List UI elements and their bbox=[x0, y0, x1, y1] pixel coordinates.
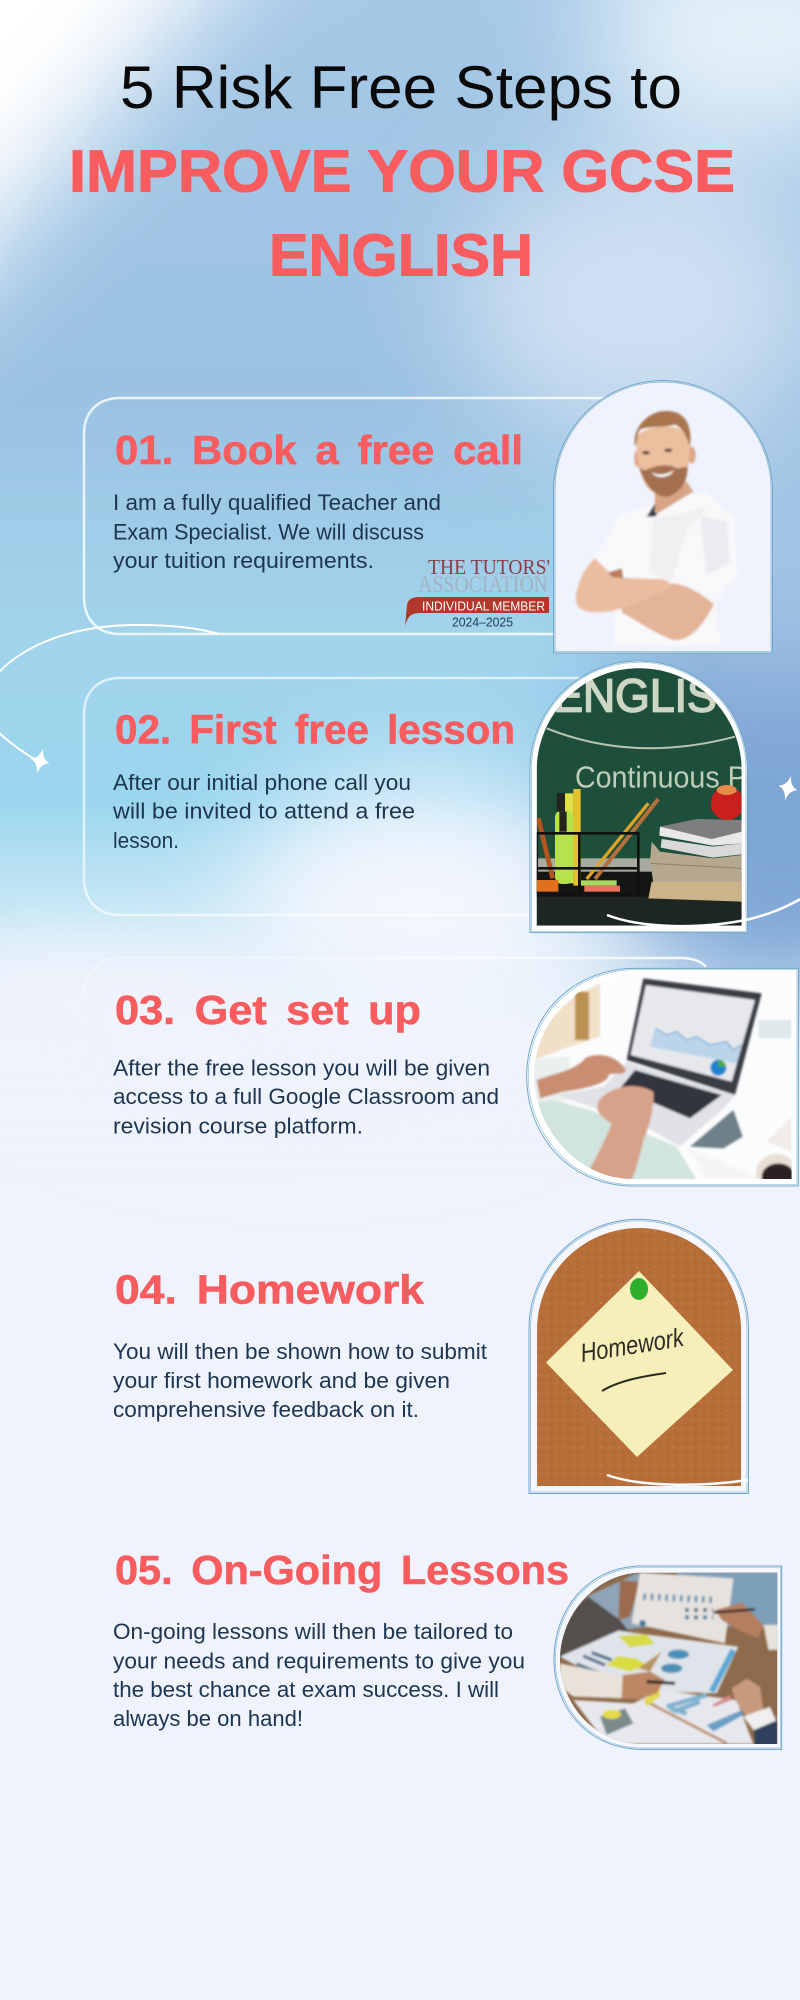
white curve over image bbox=[607, 1475, 748, 1485]
step 5 heading: 05. On-Going Lessons bbox=[115, 1547, 569, 1593]
step 5 text bbox=[113, 1619, 525, 1731]
step 3 text: After the free lesson you will be given bbox=[113, 1056, 490, 1080]
step 1 text: I am a fully qualified Teacher and bbox=[113, 490, 441, 515]
mug and notebook bbox=[767, 1117, 792, 1152]
step 1 text: Exam Specialist. We will discuss bbox=[113, 520, 424, 544]
title: ENGLISH bbox=[269, 222, 533, 288]
step 4 text: comprehensive feedback on it. bbox=[113, 1397, 419, 1422]
image: chalkboard with books, pencils and apple in an arch: Continuous P bbox=[575, 761, 747, 795]
decorative swoosh with star, left bbox=[0, 625, 219, 776]
image: homework sticky note pinned on cork board bbox=[529, 1219, 748, 1494]
logo: The Tutors' Association badge bbox=[405, 555, 550, 630]
step 2 text: will be invited to attend a free bbox=[112, 798, 415, 824]
logo: The Tutors' Association badge: INDIVIDUAL MEMBER bbox=[422, 598, 545, 614]
shirt bbox=[595, 492, 737, 646]
neck bbox=[655, 482, 693, 514]
image: hands typing on a laptop bbox=[527, 968, 798, 1193]
step 3 text: access to a full Google Classroom and bbox=[113, 1084, 499, 1109]
step 1 text: your tuition requirements. bbox=[113, 548, 374, 573]
panel: step 3 card outline bbox=[84, 958, 706, 995]
hair bbox=[635, 411, 691, 447]
image: people reviewing charts on paper bbox=[554, 1566, 782, 1749]
hands bbox=[537, 1055, 626, 1098]
step 2 text: lesson. bbox=[113, 828, 179, 853]
beard bbox=[639, 465, 687, 497]
step 5 text: On-going lessons will then be tailored to bbox=[113, 1619, 513, 1644]
title: 5 Risk Free Steps to bbox=[120, 54, 682, 121]
logo: The Tutors' Association badge: 2024–2025 bbox=[452, 616, 513, 630]
eyes bbox=[642, 451, 650, 454]
image: chalkboard with books, pencils and apple in an arch: ENGLIS bbox=[553, 670, 717, 722]
panel: step 1 card outline bbox=[84, 398, 612, 634]
step 1 heading: 01. Book a free call bbox=[115, 427, 523, 473]
logo: The Tutors' Association badge: THE TUTORS' bbox=[428, 555, 550, 579]
step 2 text bbox=[112, 770, 415, 853]
books bbox=[648, 819, 742, 902]
step 3 text bbox=[113, 1056, 499, 1138]
laptop bbox=[627, 978, 762, 1095]
image: homework sticky note pinned on cork board: Homework bbox=[578, 1322, 687, 1368]
pencil holder bbox=[537, 789, 658, 895]
step 5 text: always be on hand! bbox=[113, 1706, 303, 1731]
step 4 text bbox=[113, 1339, 487, 1422]
ears and face bbox=[634, 450, 642, 467]
step 3 heading: 03. Get set up bbox=[115, 987, 421, 1033]
decorative swoosh with star, right bbox=[607, 773, 800, 926]
step 4 heading: 04. Homework bbox=[115, 1266, 424, 1312]
image: chalkboard with books, pencils and apple in an arch bbox=[530, 661, 747, 933]
apple bbox=[710, 789, 742, 820]
logo: The Tutors' Association badge: ASSOCIATION bbox=[418, 572, 548, 597]
step 5 text: your needs and requirements to give you bbox=[113, 1648, 525, 1674]
step 2 text: After our initial phone call you bbox=[113, 770, 411, 795]
image: smiling tutor with crossed arms in an arch bbox=[554, 381, 772, 653]
panel: step 2 card outline bbox=[84, 678, 590, 915]
title bbox=[69, 54, 735, 288]
step 5 text: the best chance at exam success. I will bbox=[113, 1677, 499, 1702]
step 4 text: your first homework and be given bbox=[113, 1368, 450, 1393]
step 3 text: revision course platform. bbox=[113, 1114, 363, 1138]
arms bbox=[622, 583, 714, 640]
step 1 text bbox=[113, 490, 441, 573]
mouth bbox=[652, 470, 674, 477]
title: IMPROVE YOUR GCSE bbox=[69, 138, 735, 204]
step 2 heading: 02. First free lesson bbox=[115, 706, 515, 752]
step 4 text: You will then be shown how to submit bbox=[113, 1339, 487, 1364]
